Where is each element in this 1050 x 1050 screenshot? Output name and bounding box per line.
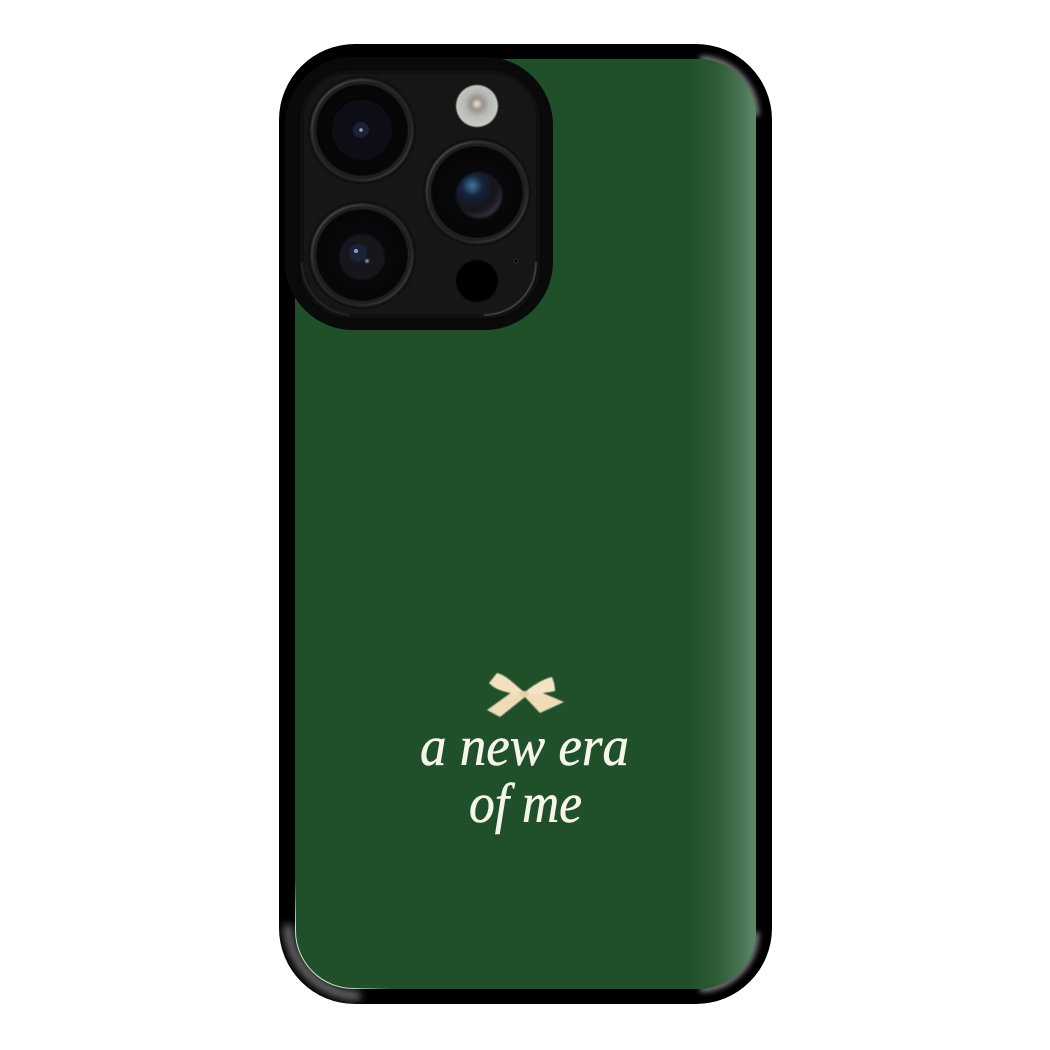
- slogan text: [420, 716, 629, 835]
- slogan text: a new era: [420, 716, 629, 778]
- camera island: [285, 57, 553, 330]
- lens: middle right: [424, 139, 530, 245]
- icon: cream ribbon bow: [487, 673, 564, 717]
- case outer black frame: [279, 44, 772, 1004]
- green back panel: [295, 59, 756, 989]
- microphone hole: [456, 260, 498, 302]
- slogan text: of me: [469, 773, 582, 835]
- small sensor dot: [514, 259, 518, 263]
- camera flash: [456, 85, 498, 127]
- lens: top left: [309, 77, 415, 183]
- lens: bottom left: [309, 202, 415, 308]
- phone case product illustration: [279, 44, 772, 1004]
